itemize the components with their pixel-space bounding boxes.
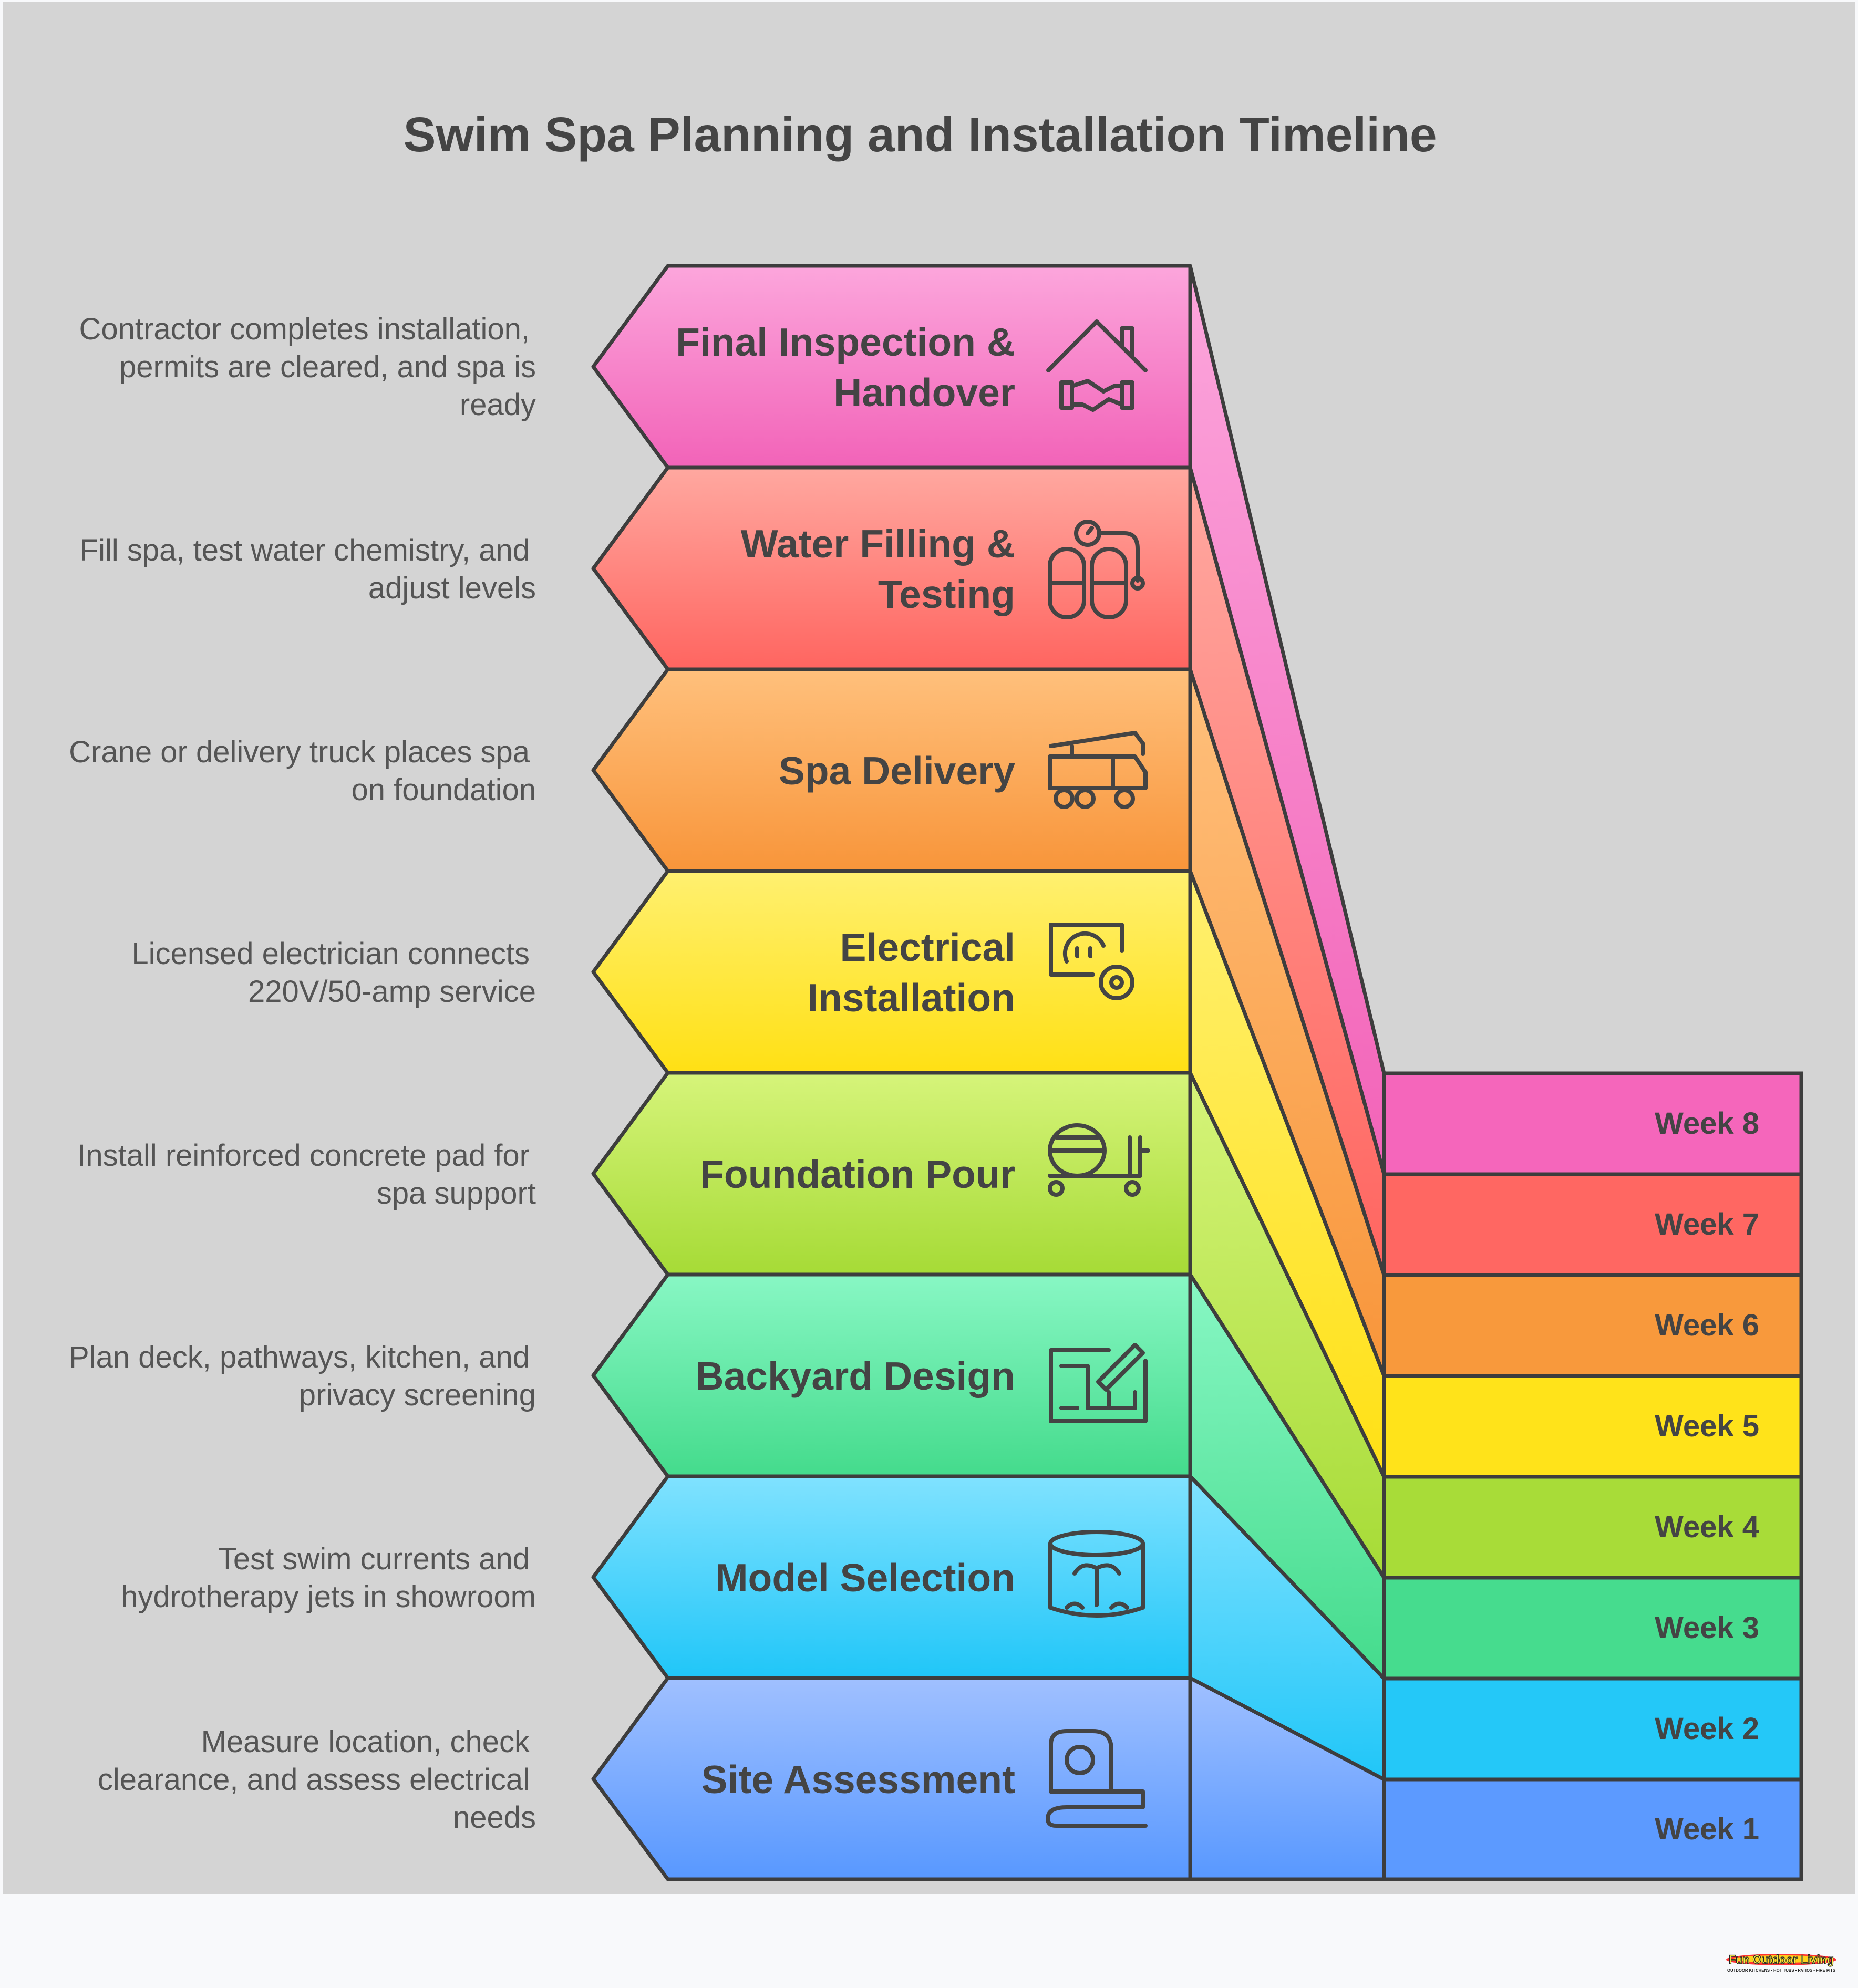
descriptions: 220V/50-amp service <box>248 975 536 1009</box>
title: Swim Spa Planning and Installation Timeline <box>403 107 1437 162</box>
descriptions <box>69 312 536 1835</box>
week boxes <box>1384 1073 1801 1879</box>
descriptions: clearance, and assess electrical <box>98 1763 530 1797</box>
arrow titles: Installation <box>807 976 1015 1020</box>
descriptions: spa support <box>377 1176 536 1210</box>
arrow titles: Foundation Pour <box>700 1152 1015 1196</box>
arrow titles: Testing <box>878 572 1015 616</box>
week boxes: Week 8 <box>1655 1106 1759 1141</box>
descriptions: Plan deck, pathways, kitchen, and <box>69 1340 530 1374</box>
icon: crane truck <box>1050 733 1145 807</box>
descriptions: hydrotherapy jets in showroom <box>121 1580 536 1614</box>
week boxes: Week 7 <box>1655 1207 1759 1241</box>
connecting bands <box>1190 266 1384 1879</box>
arrow titles: Site Assessment <box>701 1757 1015 1801</box>
descriptions: ready <box>460 388 536 422</box>
arrow titles: Electrical <box>840 925 1015 969</box>
arrow titles <box>676 320 1015 1801</box>
week boxes: Week 3 <box>1655 1611 1759 1645</box>
descriptions: Contractor completes installation, <box>79 312 530 346</box>
arrow stack <box>593 266 1190 1879</box>
icon: house handshake <box>1048 322 1145 410</box>
icon: tape measure <box>1048 1731 1145 1826</box>
descriptions: Crane or delivery truck places spa <box>69 735 530 769</box>
week boxes: Week 6 <box>1655 1308 1759 1342</box>
arrow titles: Backyard Design <box>695 1354 1015 1398</box>
week boxes: Week 2 <box>1655 1712 1759 1746</box>
week boxes: Week 5 <box>1655 1409 1759 1443</box>
week boxes: Week 1 <box>1655 1812 1759 1846</box>
arrow titles: Handover <box>833 370 1015 415</box>
descriptions: Fill spa, test water chemistry, and <box>80 533 530 567</box>
logo <box>1726 1953 1836 1973</box>
icon: pool palm <box>1050 1532 1143 1616</box>
descriptions: permits are cleared, and spa is <box>119 350 536 384</box>
icon: outlet gear <box>1051 925 1132 998</box>
arrow titles: Spa Delivery <box>779 749 1015 793</box>
descriptions: privacy screening <box>299 1378 536 1412</box>
icon: blueprint pencil <box>1051 1345 1145 1421</box>
descriptions: on foundation <box>351 773 536 807</box>
logo: Fun Outdoor Living <box>1729 1953 1834 1967</box>
descriptions: adjust levels <box>368 571 536 605</box>
logo: OUTDOOR KITCHENS • HOT TUBS • PATIOS • FIRE PITS <box>1727 1968 1836 1973</box>
arrow titles: Final Inspection & <box>676 320 1015 364</box>
icon: concrete mixer <box>1050 1125 1148 1195</box>
arrow titles: Water Filling & <box>741 522 1015 566</box>
icons <box>1048 322 1148 1826</box>
descriptions: Install reinforced concrete pad for <box>77 1138 530 1173</box>
descriptions: Measure location, check <box>201 1725 530 1759</box>
arrow titles: Model Selection <box>715 1556 1015 1600</box>
descriptions: Test swim currents and <box>218 1542 530 1576</box>
week boxes: Week 4 <box>1655 1510 1759 1544</box>
descriptions: needs <box>453 1800 536 1835</box>
icon: gas tanks <box>1050 522 1143 617</box>
descriptions: Licensed electrician connects <box>131 937 530 971</box>
